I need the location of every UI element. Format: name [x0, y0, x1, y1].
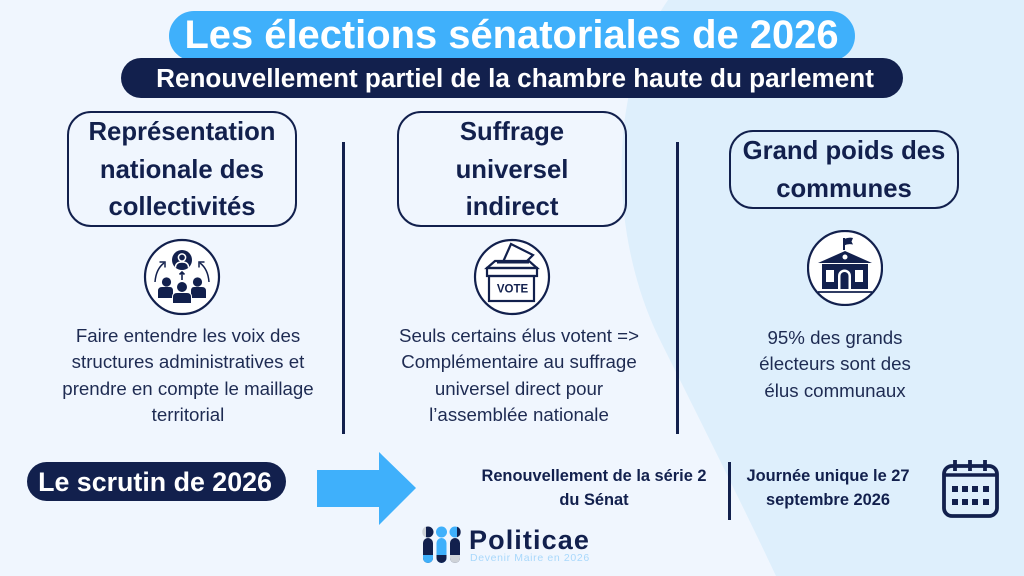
logo tagline: Devenir Maire en 2026 [470, 552, 590, 564]
icon: calendar [942, 460, 999, 518]
panel: suffrage heading: Suffrage [460, 118, 564, 146]
panel: représentation heading [67, 111, 297, 227]
panel: communes heading [729, 130, 959, 209]
divider left [342, 142, 345, 434]
label: le scrutin de 2026: Le scrutin de 2026 [38, 467, 272, 497]
logo: Politicae [422, 525, 590, 564]
logo wordmark: Politicae [469, 525, 590, 555]
text: seuls certains élus [399, 325, 639, 425]
subtitle [121, 58, 903, 98]
text: voix: territorial [152, 404, 224, 425]
panel: communes heading: Grand poids des [743, 137, 945, 165]
text: seuls certains élus: universel direct pour [435, 378, 603, 399]
text: seuls certains élus: l’assemblée nationale [429, 404, 609, 425]
text: voix: structures administratives et [72, 351, 304, 372]
label: le scrutin de 2026 [27, 462, 286, 501]
logo mark [422, 526, 461, 563]
title: Les élections sénatoriales de 2026 [184, 13, 839, 57]
text: journée unique: Journée unique le 27 [746, 467, 910, 485]
arrow [317, 452, 416, 525]
panel: communes heading: communes [776, 174, 912, 202]
panel: représentation heading: nationale des [100, 156, 264, 184]
text: voix: Faire entendre les voix des [76, 325, 300, 346]
text: 95%: élus communaux [764, 380, 906, 401]
text: journée unique [746, 467, 910, 509]
text: journée unique: septembre 2026 [766, 491, 890, 509]
panel: représentation heading: Représentation [88, 118, 276, 146]
panel: suffrage heading: universel [456, 156, 568, 184]
icon: town hall [807, 230, 883, 306]
text: 95%: électeurs sont des [759, 353, 911, 374]
icon: ballot box: VOTE [497, 284, 528, 296]
divider right [676, 142, 679, 434]
text: seuls certains élus: Seuls certains élus votent => [399, 325, 639, 346]
panel: suffrage heading [397, 111, 627, 227]
icon: people [144, 238, 220, 316]
text: voix: prendre en compte le maillage [62, 378, 314, 399]
text: renouvellement série 2 [481, 467, 706, 509]
subtitle: Renouvellement partiel de la chambre haute du parlement [156, 63, 874, 93]
icon: ballot box [474, 238, 550, 316]
text: 95% [759, 327, 911, 401]
divider bottom [728, 462, 731, 520]
panel: suffrage heading: indirect [466, 193, 558, 221]
text: 95%: 95% des grands [767, 327, 903, 348]
text: seuls certains élus: Complémentaire au suffrage [401, 351, 637, 372]
text: renouvellement série 2: du Sénat [559, 491, 629, 509]
panel: représentation heading: collectivités [108, 193, 256, 221]
text: voix [62, 325, 314, 425]
text: renouvellement série 2: Renouvellement de la série 2 [481, 467, 706, 485]
